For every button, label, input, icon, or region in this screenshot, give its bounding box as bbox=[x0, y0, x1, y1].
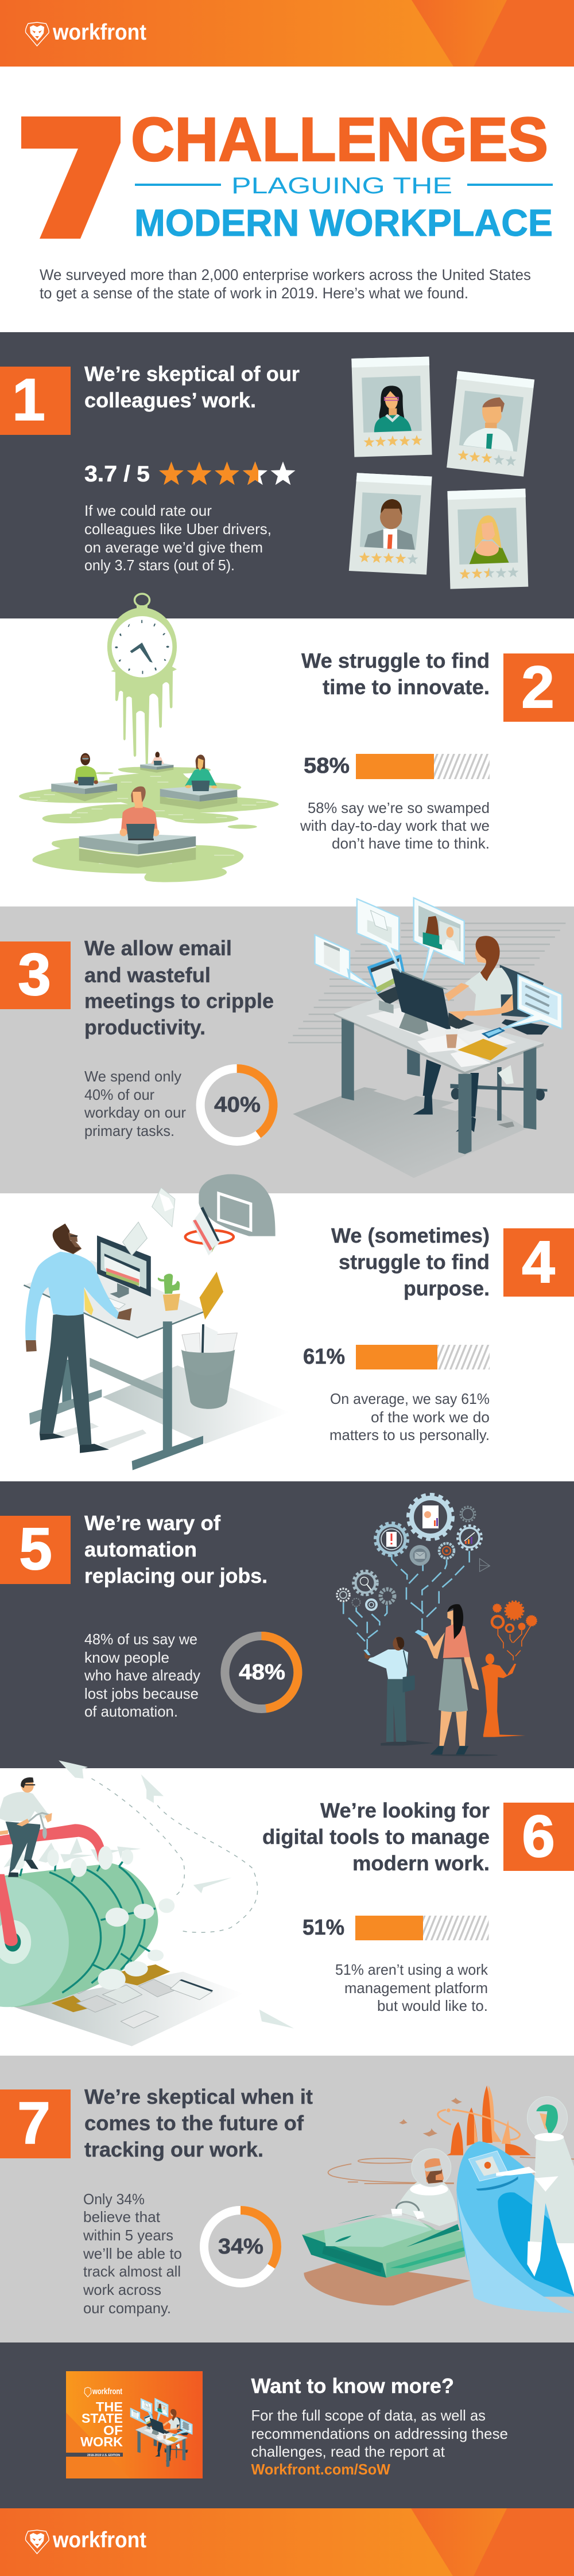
waste bin bbox=[181, 1324, 237, 1409]
intro text: We surveyed more than 2,000 enterprise workers across the United States bbox=[40, 266, 531, 283]
footer wordmark: workfront bbox=[52, 2528, 146, 2552]
call to action body: recommendations on addressing these bbox=[251, 2425, 508, 2442]
heading 6: modern work. bbox=[352, 1851, 490, 1875]
heading 3: and wasteful bbox=[84, 963, 211, 987]
cover title: THE bbox=[96, 2399, 123, 2414]
gear: alert bbox=[375, 1523, 408, 1556]
monitor bbox=[391, 968, 474, 1034]
body 6: management platform bbox=[344, 1979, 488, 1997]
worker bbox=[445, 936, 513, 1020]
connector lines bbox=[343, 1551, 531, 1660]
donut chart 34% bbox=[204, 2210, 277, 2283]
call to action body bbox=[251, 2407, 508, 2478]
body 1: colleagues like Uber drivers, bbox=[84, 520, 272, 538]
body 2 bbox=[300, 799, 490, 852]
intro text bbox=[40, 266, 531, 302]
heading 1: colleagues’ work. bbox=[84, 388, 256, 412]
cover illustration bbox=[131, 2399, 192, 2467]
heading: challenges: CHALLENGES bbox=[131, 104, 548, 174]
number badge 1 bbox=[0, 367, 71, 435]
body 2: with day-to-day work that we bbox=[300, 817, 490, 834]
call to action body: Workfront.com/SoW bbox=[251, 2461, 390, 2478]
body 5 bbox=[84, 1631, 200, 1720]
panel: challenge 6 bbox=[0, 1760, 574, 2046]
paper planes bbox=[3, 1760, 294, 2029]
heading: modern workplace: MODERN WORKPLACE bbox=[134, 201, 553, 244]
desk legs bbox=[342, 1018, 354, 1100]
body 3: workday on our bbox=[84, 1104, 186, 1121]
robot hands bbox=[11, 1846, 174, 1990]
body 4 bbox=[329, 1390, 490, 1443]
big numeral 7 bbox=[21, 116, 121, 239]
floor with papers bbox=[0, 1964, 243, 2046]
cover title: STATE bbox=[82, 2411, 123, 2426]
desk top bbox=[334, 998, 544, 1074]
panel: challenge 2 bbox=[19, 594, 574, 882]
body 4: matters to us personally. bbox=[329, 1426, 490, 1443]
number badge 7: 7 bbox=[17, 2090, 51, 2156]
card: blonde woman bbox=[447, 489, 528, 589]
number badge 3: 3 bbox=[18, 941, 51, 1007]
green drum bbox=[0, 1862, 158, 2007]
orange silhouette person bbox=[482, 1653, 525, 1737]
background lines bbox=[288, 923, 565, 1042]
body 1: only 3.7 stars (out of 5). bbox=[84, 557, 235, 574]
heading 5 bbox=[84, 1511, 267, 1587]
legs of worker bbox=[413, 1060, 479, 1132]
falling document bbox=[192, 1207, 220, 1255]
number badge 1: 1 bbox=[12, 367, 45, 433]
heading 3: productivity. bbox=[84, 1015, 205, 1039]
panel: call to action bbox=[66, 2371, 508, 2478]
gears: small cluster bbox=[337, 1589, 394, 1610]
heading 1: We’re skeptical of our bbox=[84, 362, 300, 386]
cover logo: workfront bbox=[92, 2387, 122, 2396]
desk bbox=[24, 1260, 206, 1470]
manila folder bbox=[200, 1272, 223, 1320]
body 5: of automation. bbox=[84, 1703, 178, 1720]
number badge 5: 5 bbox=[19, 1516, 52, 1582]
heading 6 bbox=[262, 1799, 490, 1875]
stat 51%: 51% bbox=[302, 1916, 344, 1940]
keyboard bbox=[97, 1295, 125, 1309]
cover edition bar: 2018-2019 U.S. EDITION bbox=[87, 2454, 120, 2457]
illustration: futuristic workers and hover car bbox=[302, 2085, 574, 2313]
floor shadow bbox=[103, 1365, 289, 1444]
intro text: to get a sense of the state of work in 2019. Here’s what we found. bbox=[40, 285, 468, 302]
heading 7: tracking our work. bbox=[84, 2138, 263, 2161]
yellow note bbox=[84, 1288, 94, 1316]
panel: challenge 5 bbox=[0, 1495, 537, 1756]
icon: clock ring bbox=[134, 594, 149, 612]
body 1: on average we’d give them bbox=[84, 539, 263, 556]
gear: small outline bbox=[460, 1507, 475, 1522]
illustration: melting clock and workers in puddles bbox=[19, 594, 279, 882]
donut chart 40% bbox=[200, 1068, 273, 1142]
heading 6: digital tools to manage bbox=[262, 1825, 490, 1849]
body 7: within 5 years bbox=[83, 2227, 173, 2244]
stat 61%: 61% bbox=[303, 1345, 345, 1369]
body 7 bbox=[83, 2190, 182, 2317]
body 5: lost jobs because bbox=[84, 1685, 199, 1702]
body 6: 51% aren’t using a work bbox=[335, 1961, 488, 1978]
report cover bbox=[66, 2371, 203, 2478]
body 2: 58% say we’re so swamped bbox=[308, 799, 490, 816]
melting clock bbox=[107, 608, 177, 765]
number badge 4: 4 bbox=[522, 1229, 555, 1295]
cover logo bbox=[84, 2387, 122, 2397]
block: back desk bbox=[140, 752, 173, 773]
puddle bbox=[19, 767, 279, 882]
man with phone bbox=[363, 1637, 434, 1746]
woman in suit bbox=[496, 2096, 574, 2295]
card: man in white shirt bbox=[447, 371, 534, 477]
driver bbox=[391, 2149, 457, 2226]
gear: email bbox=[411, 1547, 428, 1564]
heading 4 bbox=[331, 1224, 490, 1300]
body 5: 48% of us say we bbox=[84, 1631, 197, 1648]
heading 3 bbox=[84, 936, 274, 1039]
number badge 2 bbox=[503, 653, 574, 722]
donut chart 40%: 40% bbox=[214, 1093, 261, 1117]
heading 2: We struggle to find bbox=[301, 649, 490, 672]
heading 3: meetings to cripple bbox=[84, 989, 274, 1013]
bar chart 61% bbox=[356, 1345, 490, 1369]
pink pipe bbox=[0, 1824, 104, 1946]
standing man bbox=[25, 1224, 132, 1453]
body 6: but would like to. bbox=[377, 1997, 488, 2014]
hover car bbox=[302, 2214, 465, 2278]
cactus bbox=[158, 1274, 180, 1311]
cover title: OF bbox=[103, 2423, 123, 2438]
gear: growth chart bbox=[457, 1526, 482, 1550]
heading 2: time to innovate. bbox=[323, 675, 490, 699]
body 1: If we could rate our bbox=[84, 502, 212, 519]
woman with phone bbox=[415, 1604, 498, 1756]
number badge 3 bbox=[0, 941, 71, 1009]
body 7: we’ll be able to bbox=[83, 2245, 182, 2262]
number badge 4 bbox=[503, 1228, 574, 1297]
heading 4: We (sometimes) bbox=[331, 1224, 490, 1247]
body 3: We spend only bbox=[84, 1068, 181, 1085]
ground rings bbox=[328, 2157, 574, 2184]
body 7: Only 34% bbox=[83, 2190, 145, 2208]
body 4: of the work we do bbox=[371, 1408, 490, 1426]
cover title: WORK bbox=[80, 2434, 123, 2449]
illustration: man steering a paper-throwing machine bbox=[0, 1760, 294, 2046]
back desk legs bbox=[407, 1049, 420, 1076]
panel: challenge 3 bbox=[0, 898, 565, 1178]
number badge 5 bbox=[0, 1516, 71, 1584]
illustration: automation gears and people bbox=[337, 1495, 537, 1756]
heading 7 bbox=[84, 2085, 313, 2161]
body 5: know people bbox=[84, 1649, 169, 1666]
hoop bbox=[185, 1230, 234, 1244]
bar chart 51% bbox=[355, 1916, 489, 1940]
number badge 6: 6 bbox=[522, 1803, 555, 1869]
body 7: our company. bbox=[83, 2299, 171, 2317]
body 7: work across bbox=[83, 2281, 161, 2298]
number badge 2: 2 bbox=[521, 654, 554, 720]
bar chart 58% bbox=[356, 754, 490, 779]
body 5: who have already bbox=[84, 1667, 200, 1684]
number badge 6 bbox=[503, 1803, 574, 1871]
heading 6: We’re looking for bbox=[320, 1799, 490, 1822]
body 3 bbox=[84, 1068, 186, 1139]
heading 4: purpose. bbox=[404, 1277, 490, 1300]
illustration: rated employee cards bbox=[349, 357, 534, 589]
block: front desk bbox=[79, 787, 196, 868]
desk items bbox=[417, 1028, 516, 1084]
logo wordmark: workfront bbox=[52, 20, 146, 45]
call to action heading: Want to know more? bbox=[251, 2374, 454, 2398]
heading 5: We’re wary of bbox=[84, 1511, 221, 1535]
ground shadow bbox=[304, 2262, 471, 2306]
floor shadow bbox=[293, 1087, 527, 1178]
gears: orange silhouette cluster bbox=[492, 1602, 537, 1632]
number badge 7 bbox=[0, 2089, 71, 2158]
icon: footer lion shield bbox=[25, 2530, 49, 2554]
illustration: man at standing desk tossing work bbox=[24, 1174, 289, 1470]
donut chart 34%: 34% bbox=[218, 2235, 263, 2259]
call to action body: challenges, read the report at bbox=[251, 2443, 445, 2460]
body 3: primary tasks. bbox=[84, 1122, 174, 1139]
body 7: believe that bbox=[83, 2208, 161, 2225]
gear: reports bbox=[409, 1495, 452, 1539]
flying envelope bbox=[152, 1188, 175, 1227]
panel: challenge 4 bbox=[24, 1174, 574, 1470]
title bbox=[21, 104, 553, 244]
footer band bbox=[0, 2508, 574, 2576]
card: man in suit bbox=[349, 473, 432, 575]
blue pod bbox=[456, 2141, 574, 2313]
heading: plaguing the: PLAGUING THE bbox=[231, 173, 452, 199]
panel: challenge 1 bbox=[0, 357, 534, 589]
panel: challenge 7 bbox=[0, 2085, 574, 2317]
body 1 bbox=[84, 502, 272, 574]
heading 2 bbox=[301, 649, 490, 699]
heading 3: We allow email bbox=[84, 936, 232, 960]
call to action body: For the full scope of data, as well as bbox=[251, 2407, 486, 2424]
message bubbles bbox=[315, 898, 562, 1029]
man at the wheel bbox=[0, 1777, 52, 1877]
heading 4: struggle to find bbox=[339, 1250, 490, 1274]
gear: target bbox=[439, 1543, 454, 1558]
body 2: don’t have time to think. bbox=[332, 835, 490, 852]
header band bbox=[0, 0, 574, 67]
icon: workfront lion shield bbox=[25, 22, 49, 46]
donut chart 48% bbox=[225, 1636, 298, 1709]
cover edition bar bbox=[66, 2453, 123, 2457]
heading 7: We’re skeptical when it bbox=[84, 2085, 313, 2108]
stat 58%: 58% bbox=[304, 754, 350, 778]
body 7: track almost all bbox=[83, 2263, 181, 2280]
heading: plaguing the bbox=[135, 173, 553, 199]
backboard bbox=[199, 1174, 276, 1236]
rating stars bbox=[159, 461, 295, 485]
laptop bbox=[367, 954, 410, 1014]
body 6 bbox=[335, 1961, 488, 2014]
body 4: On average, we say 61% bbox=[330, 1390, 490, 1407]
gear: search bbox=[354, 1571, 378, 1595]
heading 5: automation bbox=[84, 1538, 197, 1561]
alien city bbox=[399, 2085, 531, 2155]
heading 5: replacing our jobs. bbox=[84, 1564, 267, 1587]
donut chart 48%: 48% bbox=[239, 1660, 285, 1684]
rating value: 3.7 / 5 bbox=[84, 462, 150, 487]
heading 7: comes to the future of bbox=[84, 2111, 304, 2135]
illustration: woman at desk overwhelmed by messages bbox=[288, 898, 565, 1178]
cover title bbox=[80, 2399, 123, 2449]
body 3: 40% of our bbox=[84, 1086, 154, 1103]
block: right desk bbox=[160, 754, 237, 810]
chair bbox=[450, 965, 549, 1100]
dashed flight paths bbox=[91, 1779, 258, 1932]
flying checklist bbox=[123, 1222, 147, 1255]
heading 1 bbox=[84, 362, 300, 412]
monitor bbox=[97, 1235, 151, 1298]
desk and worker bbox=[315, 898, 562, 1154]
card: woman with glasses bbox=[351, 357, 432, 457]
block: left desk bbox=[51, 753, 117, 801]
